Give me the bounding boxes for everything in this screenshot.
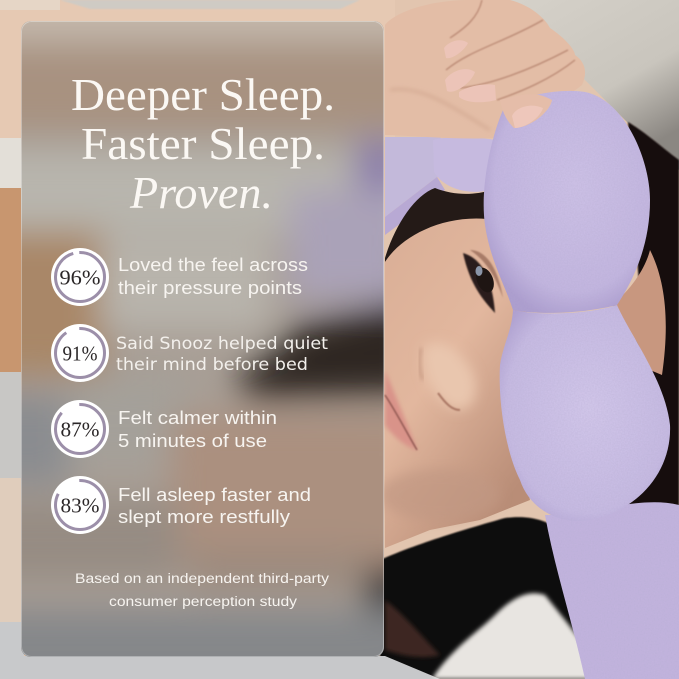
- strap, bottom right: [545, 502, 679, 679]
- heading: [71, 69, 335, 218]
- stat: 96%: Loved the feel across: [118, 255, 308, 275]
- nose: [419, 343, 476, 410]
- stat: 91%: Said Snooz helped quiet: [116, 334, 329, 353]
- upper lobe: [484, 91, 650, 313]
- fingernails: [444, 40, 468, 58]
- stat: 83%: 83%: [60, 494, 100, 518]
- skin behind pillow: [612, 250, 666, 375]
- stat: 83%: [51, 476, 311, 534]
- lips: [385, 370, 417, 450]
- white fur, bottom: [432, 593, 605, 679]
- stat: 83%: slept more restfully: [118, 507, 290, 527]
- footnote: [75, 571, 329, 609]
- frosted panel: [21, 21, 384, 657]
- hand: [385, 0, 585, 139]
- stat: 83%: Fell asleep faster and: [118, 485, 311, 505]
- stat: 87%: Felt calmer within: [118, 408, 277, 428]
- plush eye pillow: [484, 91, 679, 679]
- finger creases: [446, 0, 575, 100]
- footnote: consumer perception study: [109, 594, 297, 609]
- stat: 87%: 87%: [60, 418, 100, 442]
- stat: 96%: their pressure points: [118, 278, 302, 298]
- heading: Deeper Sleep.: [71, 69, 335, 120]
- face: [385, 219, 530, 548]
- stat: 96%: [51, 248, 308, 306]
- heading: Proven.: [129, 167, 273, 218]
- stat: 91%: their mind before bed: [116, 355, 308, 374]
- stat: 87%: [51, 400, 277, 458]
- knit shirt, bottom edge: [20, 656, 440, 679]
- stat: 96%: 96%: [60, 266, 100, 290]
- heading: Faster Sleep.: [81, 118, 325, 169]
- left edge: arm, bedding and shirt: [0, 0, 395, 679]
- fur, top right: [500, 0, 679, 170]
- hair, forehead: [385, 188, 500, 262]
- cheek shadow: [380, 469, 500, 521]
- footnote: Based on an independent third-party: [75, 571, 329, 586]
- blurred photo through glass: [21, 21, 384, 657]
- hair, right side: [620, 122, 679, 520]
- lower lobe: [500, 305, 670, 521]
- purple strap, upper left: [385, 137, 495, 235]
- stat: 87%: 5 minutes of use: [118, 431, 267, 451]
- stat: 91%: 91%: [62, 342, 98, 366]
- fingertip over pillow: [500, 94, 552, 128]
- eye: [463, 250, 503, 313]
- stat: 91%: [51, 324, 329, 382]
- hair, below neck: [380, 517, 610, 679]
